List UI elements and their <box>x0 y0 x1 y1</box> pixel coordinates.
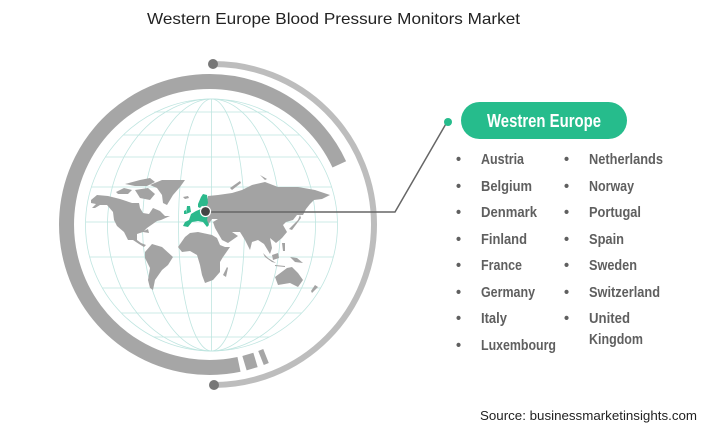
country list left column: Luxembourg <box>481 338 556 354</box>
Baffin island <box>135 188 155 200</box>
country list left column <box>456 152 556 354</box>
country list right column: • <box>564 179 569 195</box>
thick grey ring <box>67 81 339 367</box>
country list left column: • <box>456 179 461 195</box>
Japan <box>289 215 301 230</box>
country list left column: Italy <box>481 311 507 327</box>
country list left column: • <box>456 258 461 274</box>
country list right column: Spain <box>589 232 624 248</box>
country list left column: Belgium <box>481 179 532 195</box>
country list left column: • <box>456 205 461 221</box>
ring block <box>244 360 256 363</box>
New Guinea <box>290 257 303 263</box>
country list right column: • <box>564 152 569 168</box>
connector line <box>205 122 447 212</box>
arc bottom end dot <box>209 380 219 390</box>
country list right column: • <box>564 285 569 301</box>
thin outer arc <box>213 64 374 385</box>
country list left column: Finland <box>481 232 527 248</box>
country list left column: • <box>456 232 461 248</box>
Western Europe highlight <box>183 194 209 227</box>
Eurasia <box>205 182 330 254</box>
South America <box>145 244 173 290</box>
Borneo <box>272 253 279 260</box>
North America <box>91 195 170 247</box>
country list right column: Switzerland <box>589 285 660 301</box>
ring small block <box>261 356 266 358</box>
country list right column <box>564 152 663 348</box>
country list left column: France <box>481 258 522 274</box>
country list right column: • <box>564 258 569 274</box>
source note: Source: businessmarketinsights.com <box>480 408 697 423</box>
Australia <box>275 267 303 287</box>
country list left column: Germany <box>481 285 535 301</box>
Severnaya Zemlya <box>260 175 267 180</box>
country list right column: United <box>589 311 630 327</box>
Philippines <box>282 243 285 251</box>
Arctic islands <box>116 188 132 194</box>
title: Western Europe Blood Pressure Monitors Market <box>147 11 521 28</box>
country list right column: Portugal <box>589 205 641 221</box>
country list left column: • <box>456 311 461 327</box>
Java <box>275 265 285 267</box>
globe grid <box>86 99 338 351</box>
country list left column: • <box>456 152 461 168</box>
arc top end dot <box>208 59 218 69</box>
country list left column: Austria <box>481 152 525 168</box>
country list right column: • <box>564 205 569 221</box>
Madagascar <box>223 267 228 277</box>
country list right column: • <box>564 232 569 248</box>
country list left column: • <box>456 285 461 301</box>
New Zealand <box>311 285 318 293</box>
country list right column: Kingdom <box>589 332 643 348</box>
region pill: Westren Europe <box>487 111 601 131</box>
Novaya Zemlya <box>230 181 241 190</box>
world map <box>91 175 330 293</box>
country list left column: Denmark <box>481 205 538 221</box>
country list right column: Netherlands <box>589 152 663 168</box>
country list right column: Sweden <box>589 258 637 274</box>
map location dot <box>200 206 210 216</box>
country list left column: • <box>456 338 461 354</box>
country list right column: • <box>564 311 569 327</box>
Africa <box>178 232 230 283</box>
Sumatra <box>263 253 276 263</box>
Greenland <box>150 180 185 205</box>
connector end dot <box>444 118 452 126</box>
region pill <box>461 102 627 139</box>
Arctic islands north <box>125 178 155 186</box>
country list right column: Norway <box>589 179 634 195</box>
Iceland <box>183 196 189 199</box>
